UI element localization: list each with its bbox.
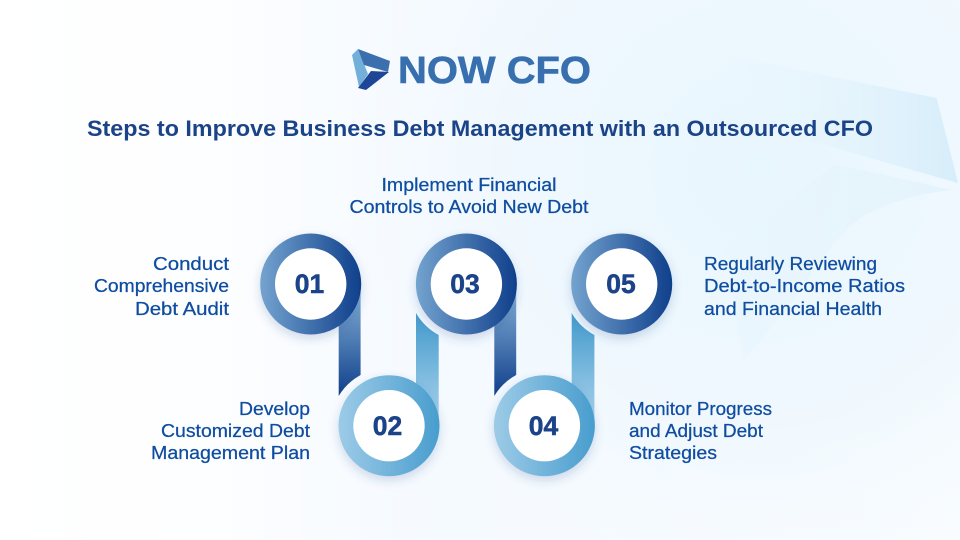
step 02 circle (338, 375, 440, 476)
step 4 label: Monitor Progress (629, 399, 772, 419)
step 04 circle (494, 375, 595, 476)
step 3 label: Controls to Avoid New Debt (350, 197, 588, 217)
step 1 label (94, 254, 229, 319)
step 03 circle (416, 234, 517, 334)
step 03 circle: 03 (450, 269, 480, 299)
connector 1 to 2 (339, 290, 361, 396)
connector 2 to 3 (416, 313, 439, 425)
step 5 label: Regularly Reviewing (704, 254, 877, 274)
background arrow shapes (700, 50, 958, 362)
step 1 label: Comprehensive (94, 276, 229, 296)
step 4 label: Strategies (629, 443, 717, 463)
connector 3 to 4 (494, 290, 516, 396)
step 2 label: Develop (239, 399, 310, 419)
step 1 label: Conduct (153, 254, 229, 274)
step 04 circle: 04 (529, 411, 558, 441)
step 4 label (629, 399, 772, 463)
step 5 label: Debt-to-Income Ratios (704, 276, 905, 296)
step 02 circle: 02 (373, 411, 402, 441)
step 2 label (151, 399, 310, 463)
step 2 label: Management Plan (151, 443, 310, 463)
step 3 label (350, 175, 588, 217)
logo wordmark: NOW CFO (398, 50, 591, 92)
step 05 circle (571, 234, 672, 334)
title: Steps to Improve Business Debt Management with an Outsourced CFO (87, 116, 873, 141)
icon: logo arrow (352, 49, 390, 90)
step 05 circle: 05 (606, 269, 636, 299)
step 01 circle: 01 (295, 269, 324, 299)
step 5 label: and Financial Health (704, 299, 882, 319)
step 2 label: Customized Debt (161, 421, 310, 441)
step 3 label: Implement Financial (382, 175, 556, 195)
connector 4 to 5 (572, 313, 594, 425)
step 1 label: Debt Audit (135, 299, 229, 319)
logo: NOW CFO (352, 49, 591, 92)
step 01 circle (260, 234, 361, 334)
step 4 label: and Adjust Debt (629, 421, 763, 441)
step 5 label (704, 254, 905, 319)
